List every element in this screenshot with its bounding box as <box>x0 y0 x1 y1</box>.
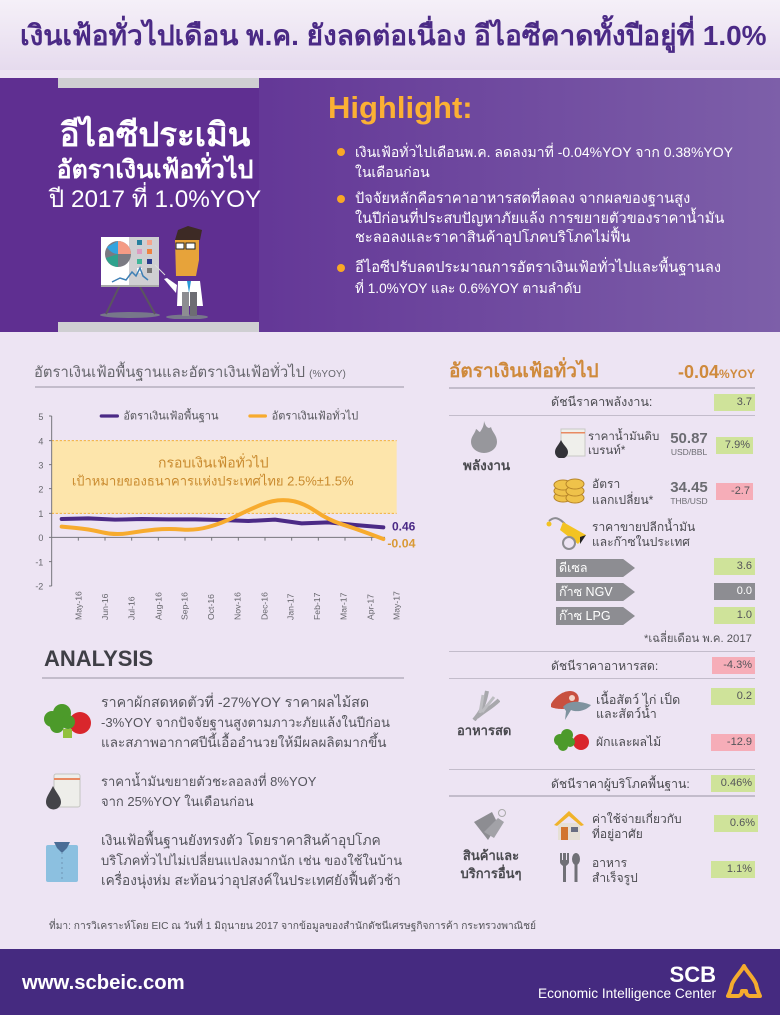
icon: shirt <box>46 842 78 882</box>
value -2.7 <box>716 483 753 500</box>
exchange price: 34.45 <box>670 479 708 496</box>
icon: flame <box>471 421 497 453</box>
value -2.7: -2.7 <box>731 485 750 497</box>
diesel arrow: ดีเซล <box>559 561 588 575</box>
x-axis labels: Sep-16 <box>179 592 189 620</box>
value -12.9: -12.9 <box>727 736 752 748</box>
value 3.7: 3.7 <box>737 396 752 408</box>
retail fuel label <box>592 518 695 549</box>
bullet 2 <box>337 188 724 246</box>
bullet 1: ในเดือนก่อน <box>355 164 430 180</box>
ready meal label: สำเร็จรูป <box>592 870 638 884</box>
value 0.2 <box>711 688 755 705</box>
x-axis labels: Oct-16 <box>206 594 216 620</box>
value 1.0 <box>714 607 755 624</box>
value -4.3: -4.3% <box>723 659 752 671</box>
value 1.0: 1.0 <box>737 609 752 621</box>
housing label: ค่าใช้จ่ายเกี่ยวกับ <box>592 812 682 826</box>
bullet 2: ในปีก่อนที่ประสบปัญหาภัยแล้ง การขยายตัวของราคาน้ำมัน <box>355 210 724 226</box>
other goods label: บริการอื่นๆ <box>460 866 522 881</box>
band label: เป้าหมายของธนาคารแห่งประเทศไทย 2.5%±1.5% <box>72 474 354 489</box>
x-axis labels: Aug-16 <box>153 592 163 620</box>
y-axis labels: -2 <box>35 582 43 592</box>
value 0.6 <box>714 815 758 832</box>
exchange rate label <box>592 477 654 506</box>
highlight band <box>0 78 780 332</box>
icon: house <box>554 811 584 840</box>
target band <box>52 441 397 513</box>
legend <box>101 407 358 422</box>
panel heading <box>48 116 261 213</box>
exchange rate label: แลกเปลี่ยน* <box>592 492 653 506</box>
bullet 3: อีไอซีปรับลดประมาณการอัตราเงินเฟ้อทั่วไปและพื้นฐานลง <box>355 260 721 276</box>
bullet 3 <box>337 256 721 296</box>
value 0.2: 0.2 <box>737 690 752 702</box>
lpg arrow <box>556 607 635 625</box>
core index row: ดัชนีราคาผู้บริโภคพื้นฐาน: <box>551 777 690 791</box>
panel heading: ปี 2017 ที่ 1.0%YOY <box>49 186 261 213</box>
x-axis labels: May-16 <box>73 591 83 620</box>
energy label: พลังงาน <box>463 458 510 473</box>
value 3.6 <box>714 558 755 575</box>
crude price: USD/BBL <box>671 447 707 457</box>
left panel <box>0 78 259 332</box>
x-axis labels: Jul-16 <box>127 596 137 620</box>
icon: vegetables small <box>554 729 589 751</box>
analysis text 1: และสภาพอากาศปีนี้เอื้ออำนวยให้มีผลผลิตมากขึ้น <box>101 735 387 750</box>
end label headline: -0.04 <box>387 536 416 550</box>
ngv arrow: ก๊าซ NGV <box>559 585 613 599</box>
crude label <box>588 428 659 457</box>
analysis text 1 <box>101 692 390 750</box>
icon: oil tank small <box>555 428 586 458</box>
value 0.0 <box>714 583 755 600</box>
x-axis labels: May-17 <box>391 591 401 620</box>
panel heading: อีไอซีประเมิน <box>60 116 250 153</box>
chart heading: อัตราเงินเฟ้อพื้นฐานและอัตราเงินเฟ้อทั่วไป (%YOY) <box>34 365 346 381</box>
meat label <box>596 690 680 721</box>
x-axis labels: Jun-16 <box>100 593 110 620</box>
housing label: ที่อยู่อาศัย <box>592 827 643 841</box>
scb wordmark: Economic Intelligence Center <box>538 986 716 1001</box>
band label <box>72 453 354 489</box>
y-axis labels: 0 <box>38 533 43 543</box>
crude price <box>670 430 708 457</box>
food index row: ดัชนีราคาอาหารสด: <box>551 659 658 673</box>
icon: wheat <box>472 690 500 721</box>
analysis text 3: บริโภคทั่วไปไม่เปลี่ยนแปลงมากนัก เช่น ของใช้ในบ้าน <box>101 853 402 868</box>
analysis text 3 <box>101 830 402 889</box>
analysis text 3: เครื่องนุ่งห่ม สะท้อนว่าอุปสงค์ในประเทศยังฟื้นตัวช้า <box>101 873 401 888</box>
headline value: -0.04%YOY <box>678 362 755 382</box>
grey bar bottom <box>58 322 259 332</box>
axes <box>49 416 385 586</box>
energy index row: ดัชนีราคาพลังงาน: <box>551 395 652 409</box>
y-axis labels: -1 <box>35 557 43 567</box>
legend: อัตราเงินเฟ้อพื้นฐาน <box>123 407 219 422</box>
value 0.0: 0.0 <box>737 585 752 597</box>
y-axis labels: 1 <box>38 509 43 519</box>
source note: ที่มา: การวิเคราะห์โดย EIC ณ วันที่ 1 มิถุนายน 2017 จากข้อมูลของสำนักดัชนีเศรษฐกิจการค้า กระทรวงพาณิชย์ <box>49 921 536 932</box>
x-axis labels: Feb-17 <box>312 592 322 620</box>
retail fuel label: ราคาขายปลีกน้ำมัน <box>592 520 695 534</box>
y-axis labels: 3 <box>38 460 43 470</box>
icon: price tags <box>474 809 506 840</box>
other goods label: สินค้าและ <box>463 848 519 863</box>
icon: fork and spoon <box>560 853 580 882</box>
legend: อัตราเงินเฟ้อทั่วไป <box>272 407 358 422</box>
value 1.1 <box>711 861 755 878</box>
analysis text 2: จาก 25%YOY ในเดือนก่อน <box>101 794 254 809</box>
crude label: เบรนท์* <box>588 445 625 457</box>
diesel arrow <box>556 559 635 577</box>
icon: oil tank <box>46 774 80 810</box>
website: www.scbeic.com <box>22 972 185 994</box>
footer <box>0 949 780 1015</box>
value 0.46 <box>711 775 755 792</box>
analysis text 1: ราคาผักสดหดตัวที่ -27%YOY ราคาผลไม้สด <box>101 695 369 711</box>
value 0.46: 0.46% <box>721 777 752 789</box>
lpg arrow: ก๊าซ LPG <box>559 609 611 623</box>
y-axis labels: 4 <box>38 437 43 447</box>
bullet 3: ที่ 1.0%YOY และ 0.6%YOY ตามลำดับ <box>355 280 581 296</box>
y-axis labels: 2 <box>38 484 43 494</box>
icon: coins <box>554 478 584 504</box>
value 3.7 <box>714 394 755 411</box>
x-axis labels: Mar-17 <box>339 592 349 620</box>
grey bar top <box>58 78 259 88</box>
value 1.1: 1.1% <box>727 863 752 875</box>
exchange price: THB/USD <box>670 496 708 506</box>
panel heading: อัตราเงินเฟ้อทั่วไป <box>57 156 253 184</box>
x-axis labels <box>73 591 401 620</box>
value 0.6: 0.6% <box>730 817 755 829</box>
x-axis labels: Dec-16 <box>259 592 269 620</box>
core inflation line <box>62 518 383 527</box>
y-axis labels: 5 <box>38 412 43 422</box>
analysis text 1: -3%YOY จากปัจจัยฐานสูงตามภาวะภัยแล้งในปีก่อน <box>101 715 390 730</box>
other goods label <box>460 848 522 881</box>
exchange rate label: อัตรา <box>592 477 620 491</box>
analysis text 3: เงินเฟ้อพื้นฐานยังทรงตัว โดยราคาสินค้าอุปโภค <box>101 833 381 848</box>
icon: meat and fish <box>551 691 591 720</box>
header bar <box>0 0 780 70</box>
analysis text 2: ราคาน้ำมันขยายตัวชะลอลงที่ 8%YOY <box>101 774 316 789</box>
bullet 2: ปัจจัยหลักคือราคาอาหารสดที่ลดลง จากผลของฐานสูง <box>355 191 690 207</box>
analysis heading: ANALYSIS <box>44 646 153 671</box>
value 7.9 <box>716 437 753 454</box>
x-axis labels: Nov-16 <box>233 592 243 620</box>
ready meal label <box>592 856 638 886</box>
bullet 1 <box>337 142 733 180</box>
y-axis labels <box>35 412 43 592</box>
heading: Highlight: Highlight: <box>328 90 473 125</box>
crude price: 50.87 <box>670 430 708 447</box>
value -4.3 <box>712 657 755 674</box>
right heading: อัตราเงินเฟ้อทั่วไป <box>449 361 599 382</box>
icon: vegetables <box>44 704 91 738</box>
housing label <box>592 810 682 842</box>
scb wordmark: SCB <box>670 962 716 987</box>
value 7.9: 7.9% <box>725 439 750 451</box>
exchange price <box>670 479 708 506</box>
headline inflation line <box>62 500 383 539</box>
meat label: และสัตว์น้ำ <box>596 707 657 721</box>
scb wordmark <box>538 962 716 1001</box>
crude label: ราคาน้ำมันดิบ <box>588 431 659 443</box>
ready meal label: อาหาร <box>592 856 627 870</box>
band label: กรอบเงินเฟ้อทั่วไป <box>158 453 269 470</box>
vegetable label: ผักและผลไม้ <box>596 735 661 749</box>
bullet 1: เงินเฟ้อทั่วไปเดือนพ.ค. ลดลงมาที่ -0.04%YOY จาก 0.38%YOY <box>355 144 733 160</box>
x-axis labels: Apr-17 <box>365 594 375 620</box>
end label core: 0.46 <box>392 520 416 534</box>
bullet 2: ชะลอลงและราคาสินค้าอุปโภคบริโภคไม่ฟื้น <box>355 230 630 246</box>
meat label: เนื้อสัตว์ ไก่ เป็ด <box>596 693 680 707</box>
fresh food label: อาหารสด <box>457 723 511 738</box>
icon: presenter with chart board <box>100 226 208 319</box>
footnote: *เฉลี่ยเดือน พ.ค. 2017 <box>644 633 752 645</box>
title: เงินเฟ้อทั่วไปเดือน พ.ค. ยังลดต่อเนื่อง อีไอซีคาดทั้งปีอยู่ที่ 1.0% <box>20 20 767 51</box>
analysis text 2 <box>101 772 316 809</box>
icon: fuel nozzle <box>546 517 586 550</box>
line chart <box>35 407 416 620</box>
icon: scb logo <box>726 964 762 998</box>
x-axis labels: Jan-17 <box>285 593 295 620</box>
value 3.6: 3.6 <box>737 560 752 572</box>
ngv arrow <box>556 583 635 601</box>
value -12.9 <box>711 734 755 751</box>
retail fuel label: และก๊าซในประเทศ <box>592 535 690 549</box>
